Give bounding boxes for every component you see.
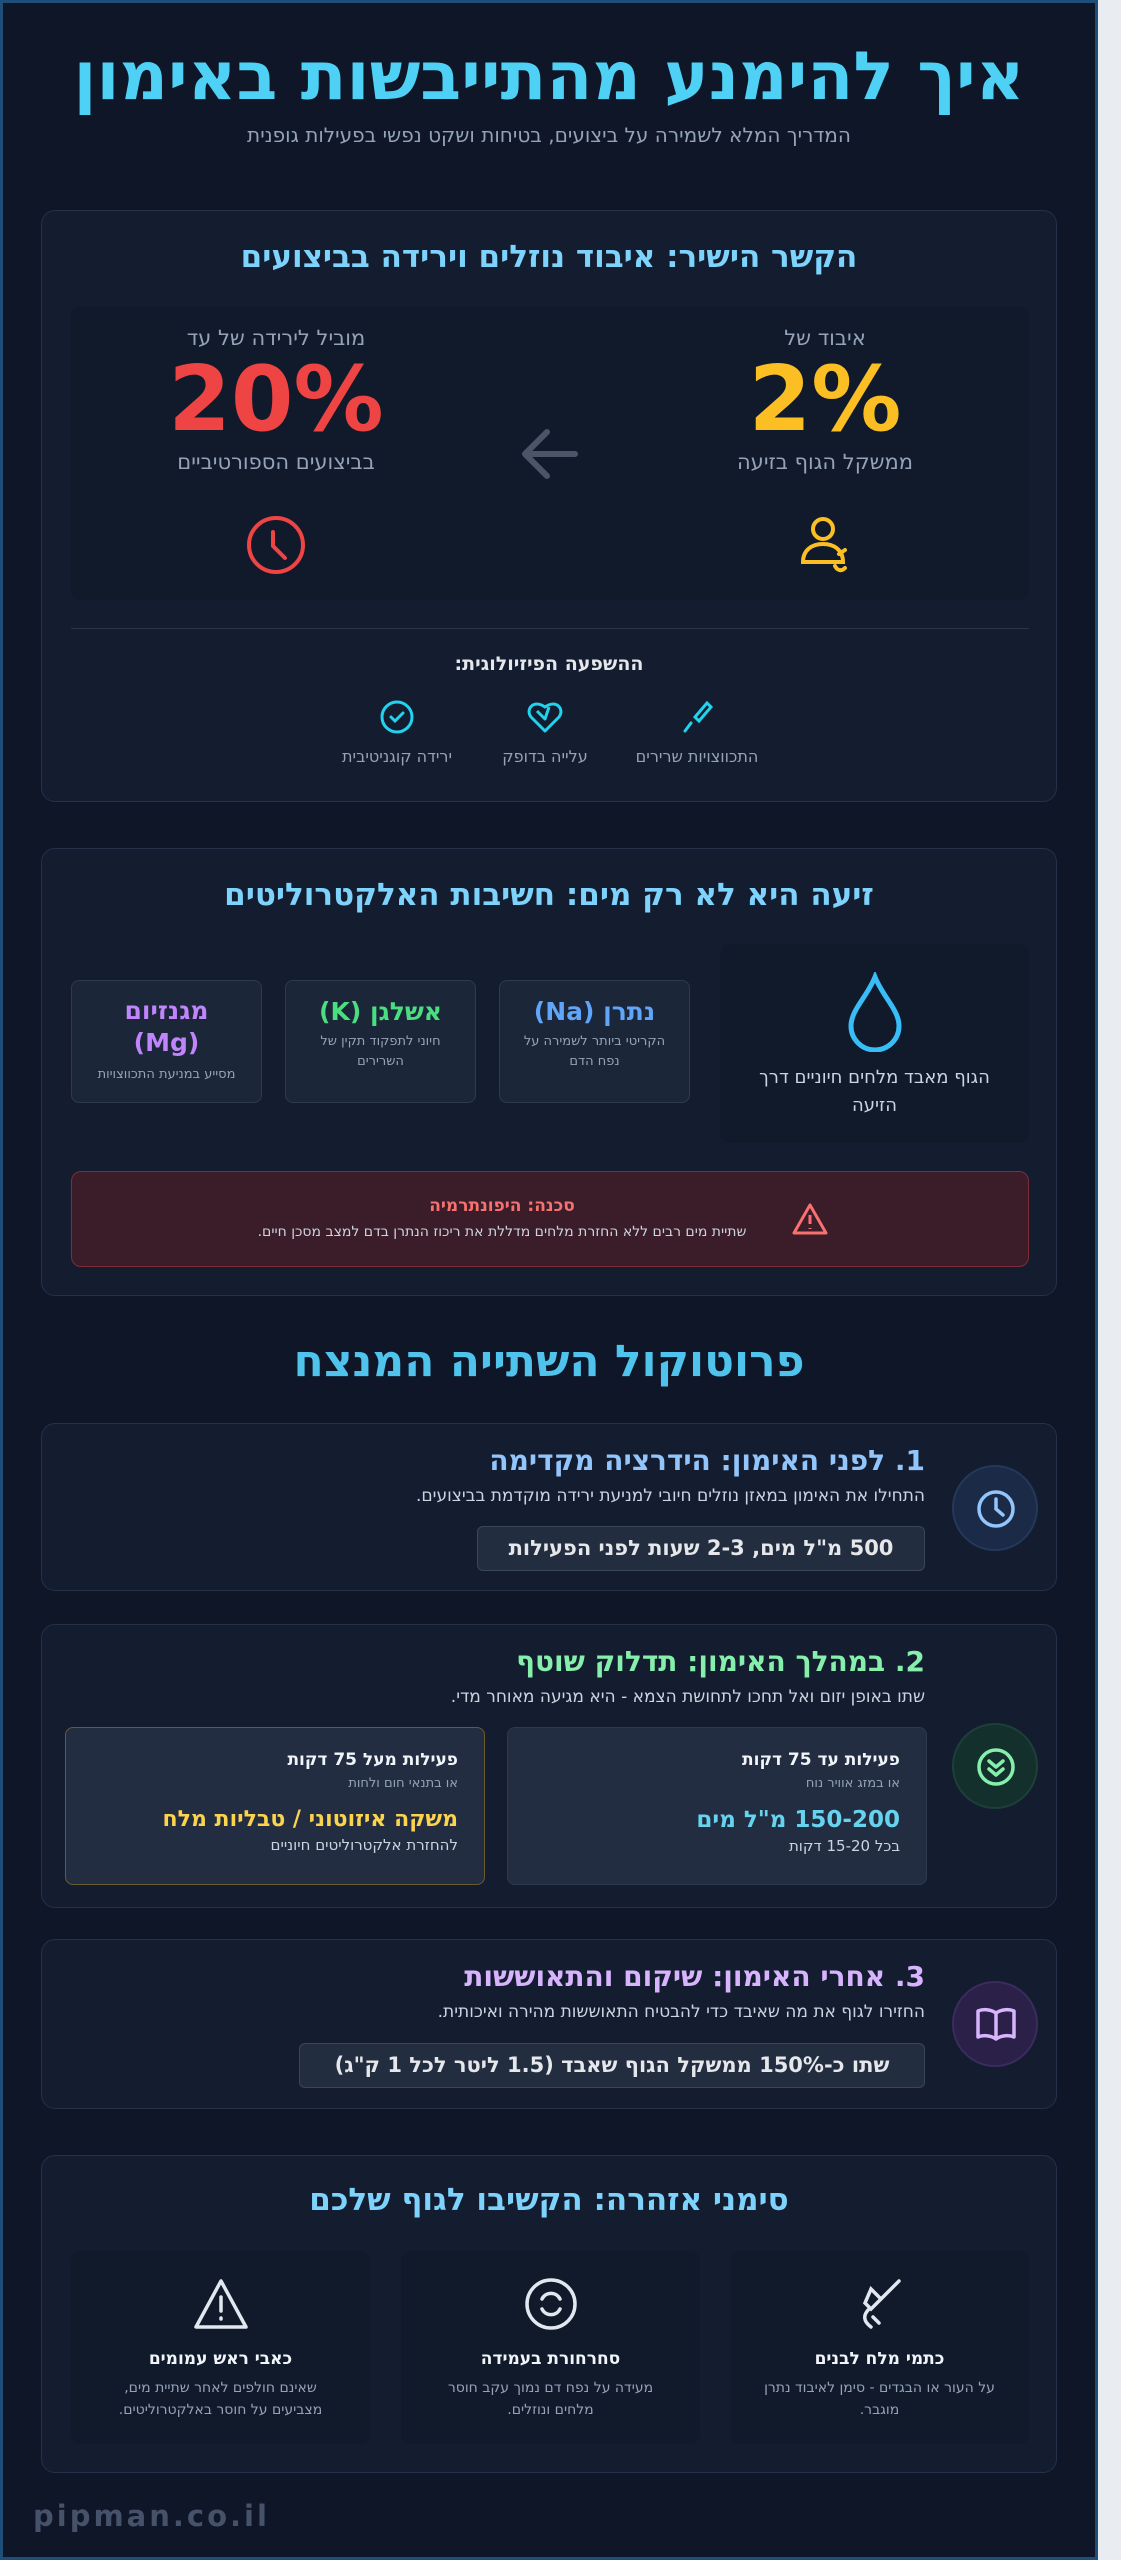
icon: chevrons bbox=[952, 1723, 1038, 1809]
icon: book bbox=[952, 1981, 1038, 2067]
sign: salt stains bbox=[730, 2251, 1029, 2444]
effect: heart rate: עלייה בדופק bbox=[502, 747, 588, 766]
step desc: שתו באופן יזום ואל תחכו לתחושת הצמא - היא מגיעה מאוחר מדי. bbox=[451, 1687, 925, 1707]
box: over 75 min: משקה איזוטוני / טבליות מלח bbox=[163, 1807, 458, 1832]
box: over 75 min bbox=[65, 1727, 485, 1885]
heading: זיעה היא לא רק מים: חשיבות האלקטרוליטים bbox=[224, 877, 874, 913]
step 3 card bbox=[41, 1939, 1057, 2109]
step title: 3. אחרי האימון: שיקום והתאוששות bbox=[464, 1960, 925, 1993]
step title: 2. במהלך האימון: תדלוק שוטף bbox=[516, 1645, 925, 1678]
effect: muscle cramps: התכווצויות שרירים bbox=[636, 747, 758, 766]
pill: 500 מ"ל מים, 2-3 שעות לפני הפעילות bbox=[509, 1536, 893, 1560]
heading: הקשר הישיר: איבוד נוזלים וירידה בביצועים bbox=[241, 239, 857, 275]
drop box: הגוף מאבד מלחים חיוניים דרך הזיעה bbox=[759, 1067, 990, 1116]
heading: סימני אזהרה: הקשיבו לגוף שלכם bbox=[309, 2182, 789, 2218]
sign: salt stains: כתמי מלח לבנים bbox=[815, 2349, 944, 2369]
sign: dizziness: סחרחורת בעמידה bbox=[481, 2349, 620, 2369]
card: sodium: הקריטי ביותר לשמירה על נפח הדם bbox=[524, 1034, 665, 1069]
sign: dizziness bbox=[401, 2251, 700, 2444]
drop box bbox=[720, 944, 1029, 1143]
panel: performance link bbox=[41, 210, 1057, 802]
step title: 1. לפני האימון: הידרציה מקדימה bbox=[489, 1444, 925, 1477]
footer brand: pipman.co.il bbox=[33, 2499, 270, 2533]
callout: hyponatremia: שתיית מים רבים ללא החזרת מלחים מדללת את ריכוז הנתרן בדם למצב מסכן חיים. bbox=[258, 1224, 746, 1240]
callout: hyponatremia: סכנה: היפונתרמיה bbox=[429, 1196, 575, 1216]
stat: 20%: מוביל לירידה של עד bbox=[187, 326, 365, 350]
card: potassium bbox=[285, 980, 476, 1103]
box: up to 75 min bbox=[507, 1727, 927, 1885]
step desc: החזירו לגוף את מה שאיבד כדי להבטיח התאוששות מהירה ואיכותית. bbox=[438, 2002, 925, 2022]
box: up to 75 min: פעילות עד 75 דקות bbox=[742, 1750, 900, 1770]
icon: warning bbox=[792, 1203, 828, 1234]
sign: dizziness: מעידה על נפח דם נמוך עקב חוסר מלחים ונוזלים. bbox=[448, 2380, 653, 2418]
stat: 20%: 20% bbox=[168, 347, 384, 452]
stat: 2% bbox=[737, 326, 913, 474]
effect: cognitive: ירידה קוגניטיבית bbox=[342, 747, 452, 766]
card: sodium bbox=[499, 980, 690, 1103]
box: up to 75 min: 150-200 מ"ל מים bbox=[696, 1807, 900, 1833]
pill bbox=[299, 2043, 925, 2088]
icon: water drop bbox=[848, 972, 902, 1052]
effect: cognitive bbox=[342, 700, 452, 766]
sign: headaches: כאבי ראש עמומים bbox=[149, 2349, 292, 2369]
subtitle: המדריך המלא לשמירה על ביצועים, בטיחות ושקט נפשי בפעילות גופנית bbox=[247, 123, 851, 147]
card: magnesium bbox=[71, 980, 262, 1103]
panel: electrolytes bbox=[41, 848, 1057, 1296]
card: potassium: אשלגן (K) bbox=[319, 997, 442, 1026]
physiological effects: ההשפעה הפיזיולוגית: bbox=[455, 653, 643, 675]
icon: sweating person bbox=[801, 517, 848, 572]
effect: muscle cramps bbox=[636, 700, 758, 766]
panel: warning signs bbox=[41, 2155, 1057, 2473]
stat: 20%: בביצועים הספורטיביים bbox=[177, 450, 375, 474]
box: up to 75 min: בכל 15-20 דקות bbox=[789, 1837, 900, 1855]
title: איך להימנע מהתייבשות באימון bbox=[74, 37, 1024, 115]
inner stats box bbox=[71, 306, 1029, 600]
icon: clock red bbox=[247, 516, 305, 574]
card: sodium: נתרן (Na) bbox=[534, 997, 655, 1026]
callout: hyponatremia bbox=[71, 1171, 1029, 1267]
card: magnesium: מגנזיום bbox=[125, 996, 208, 1025]
card: magnesium: (Mg) bbox=[134, 1028, 199, 1057]
box: over 75 min: או בתנאי חום ולחות bbox=[348, 1776, 458, 1791]
step 2 card bbox=[41, 1624, 1057, 1908]
box: over 75 min: להחזרת אלקטרוליטים חיוניים bbox=[271, 1836, 458, 1854]
pill bbox=[477, 1526, 925, 1571]
stat: 2%: 2% bbox=[749, 347, 901, 452]
pill: שתו כ-150% ממשקל הגוף שאבד (1.5 ליטר לכל 1 ק"ג) bbox=[335, 2053, 889, 2077]
effect: heart rate bbox=[502, 702, 588, 766]
section heading: protocol: פרוטוקול השתייה המנצח bbox=[293, 1336, 805, 1387]
sign: headaches bbox=[71, 2251, 370, 2444]
card: magnesium: מסייע במניעת התכווצויות bbox=[98, 1067, 235, 1082]
step 1 card bbox=[41, 1423, 1057, 1591]
card: potassium: חיוני לתפקוד תקין של השרירים bbox=[320, 1034, 441, 1069]
sign: headaches: שאינם חולפים לאחר שתיית מים, מצביעים על חוסר באלקטרוליטים. bbox=[119, 2380, 322, 2418]
icon: clock bbox=[952, 1465, 1038, 1551]
stat: 2%: ממשקל הגוף בזיעה bbox=[737, 450, 913, 474]
box: over 75 min: פעילות מעל 75 דקות bbox=[287, 1750, 458, 1770]
step desc: התחילו את האימון במאזן נוזלים חיובי למניעת ירידה מוקדמת בביצועים. bbox=[416, 1486, 925, 1506]
box: up to 75 min: או במזג אוויר נוח bbox=[806, 1776, 900, 1791]
arrow bbox=[522, 429, 578, 479]
sign: salt stains: על העור או הבגדים - סימן לאיבוד נתרן מוגבר. bbox=[764, 2380, 995, 2418]
stat: 2%: איבוד של bbox=[784, 326, 866, 350]
